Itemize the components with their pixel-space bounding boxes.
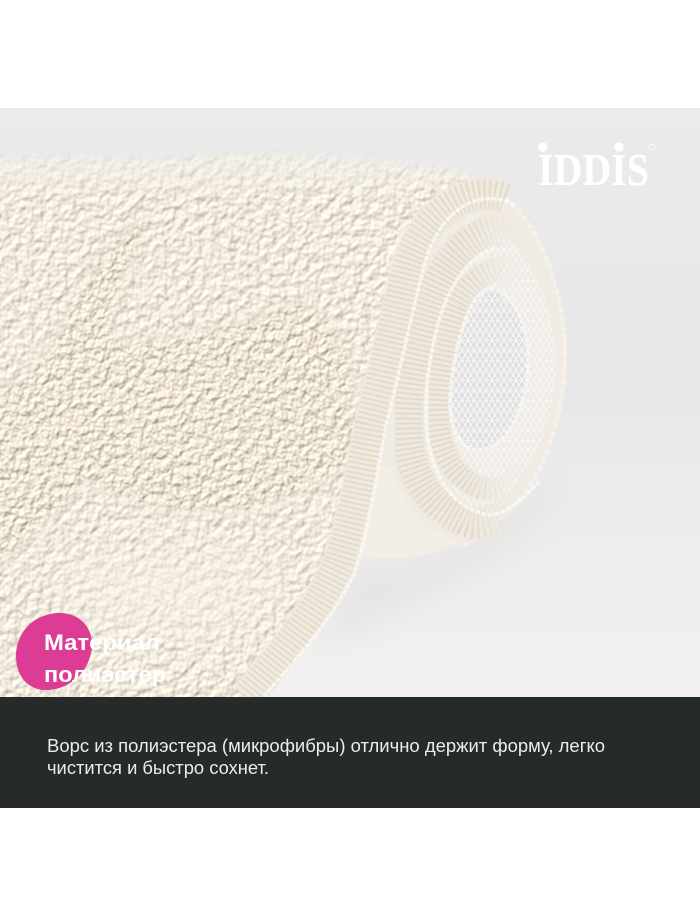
- lower pile light patch: [50, 545, 290, 635]
- inner strand, ribbed: [438, 268, 528, 490]
- pile texture: [0, 152, 468, 697]
- pink badge blob: [16, 613, 92, 690]
- dark caption band: [0, 697, 700, 808]
- backing mesh ring pattern: [420, 215, 556, 525]
- badge label: Материал: [44, 630, 160, 655]
- roll outer silhouette: [380, 310, 567, 538]
- brand logo: IDDIS: IDDIS: [538, 144, 649, 195]
- fuzzy underside of the roll: [363, 554, 418, 558]
- roll shadow: [345, 557, 466, 620]
- looped pile regions: [0, 210, 360, 564]
- badge label: полиэстер: [44, 662, 166, 687]
- roll outer stitch edge: [460, 198, 565, 548]
- caption text: чистится и быстро сохнет.: [47, 758, 269, 778]
- backing mesh ring: [420, 215, 556, 525]
- outer strand, ribbed: [407, 228, 530, 524]
- front bound edge of the mat: [247, 195, 515, 697]
- inner hole with rubber lattice: [448, 286, 530, 452]
- infographic canvas: [0, 108, 700, 808]
- caption text: Ворс из полиэстера (микрофибры) отлично держит форму, легко: [47, 736, 605, 756]
- middle stitch line: [426, 248, 540, 515]
- caption text: [47, 736, 605, 778]
- badge label: [46, 634, 165, 686]
- product photo: rolled bath mat: [0, 108, 700, 710]
- photo backdrop: [0, 108, 700, 697]
- top light haze: [0, 150, 510, 184]
- shag pile surface: [0, 152, 468, 697]
